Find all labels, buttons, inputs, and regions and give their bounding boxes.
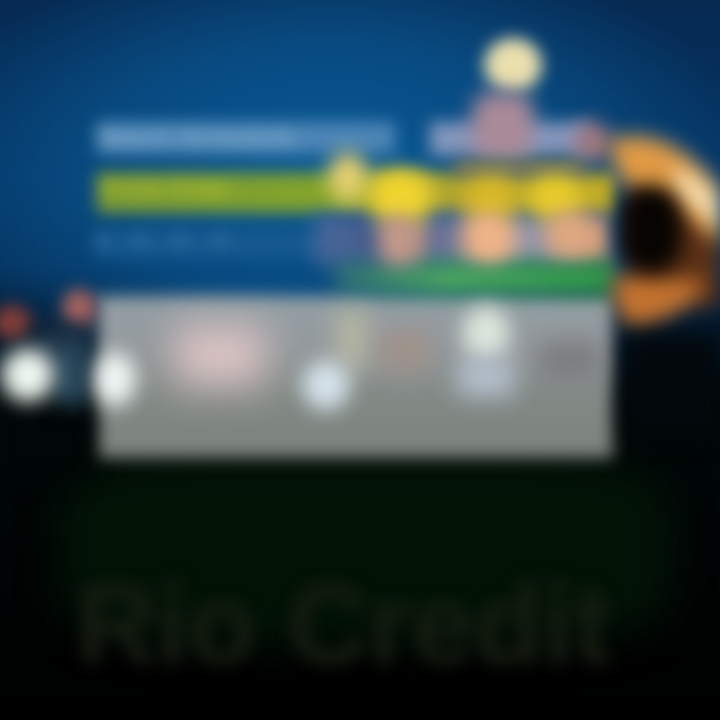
row of small date labels: 1234 [95,230,255,250]
left players: head shapes [0,278,104,359]
player torso [472,92,534,160]
header row of table, left [97,122,395,154]
yellow jersey third [530,176,580,220]
leg one [380,216,416,264]
table brown patch [380,330,430,370]
green table header band [335,262,615,294]
skin highlight [328,152,368,202]
icon: white ball in table center [302,360,350,410]
dark band under top player [455,160,585,178]
header row of table, left: Match Schedule [97,122,295,152]
right player: orange arm and dark jersey [597,120,720,338]
icon: white ball in table right [462,306,510,362]
leg three [548,212,588,254]
table warm tint patch [175,325,265,385]
background: dark green pitch glow [60,455,670,645]
right player dark legs [625,335,720,435]
table beige patch [335,310,370,370]
icon: player on top with ball [458,26,554,166]
leg two [468,214,508,260]
icon: white ball left [1,348,55,402]
header row of table, right [430,122,590,156]
panel: gray results table [97,296,613,458]
yellow player jersey [370,170,430,224]
yellow-green score band [97,173,615,213]
player arm to the right [574,122,610,162]
icon: white ball in table left [94,352,136,406]
table dark patch [540,340,600,380]
yellow-green score band: Group Stage [97,173,229,198]
row of small date labels [95,230,325,256]
yellow jersey second [465,176,515,222]
dark body [36,323,88,360]
players band behind the table [315,215,610,265]
left dark field shade [0,405,88,475]
player legs: three skin-toned shapes [366,200,598,278]
head one [0,305,32,339]
left body shade between balls [55,345,87,405]
right player dark jersey [620,186,682,272]
head two [62,289,96,329]
light lavender patch below the right ball [458,358,514,396]
icon: ball [484,38,542,92]
